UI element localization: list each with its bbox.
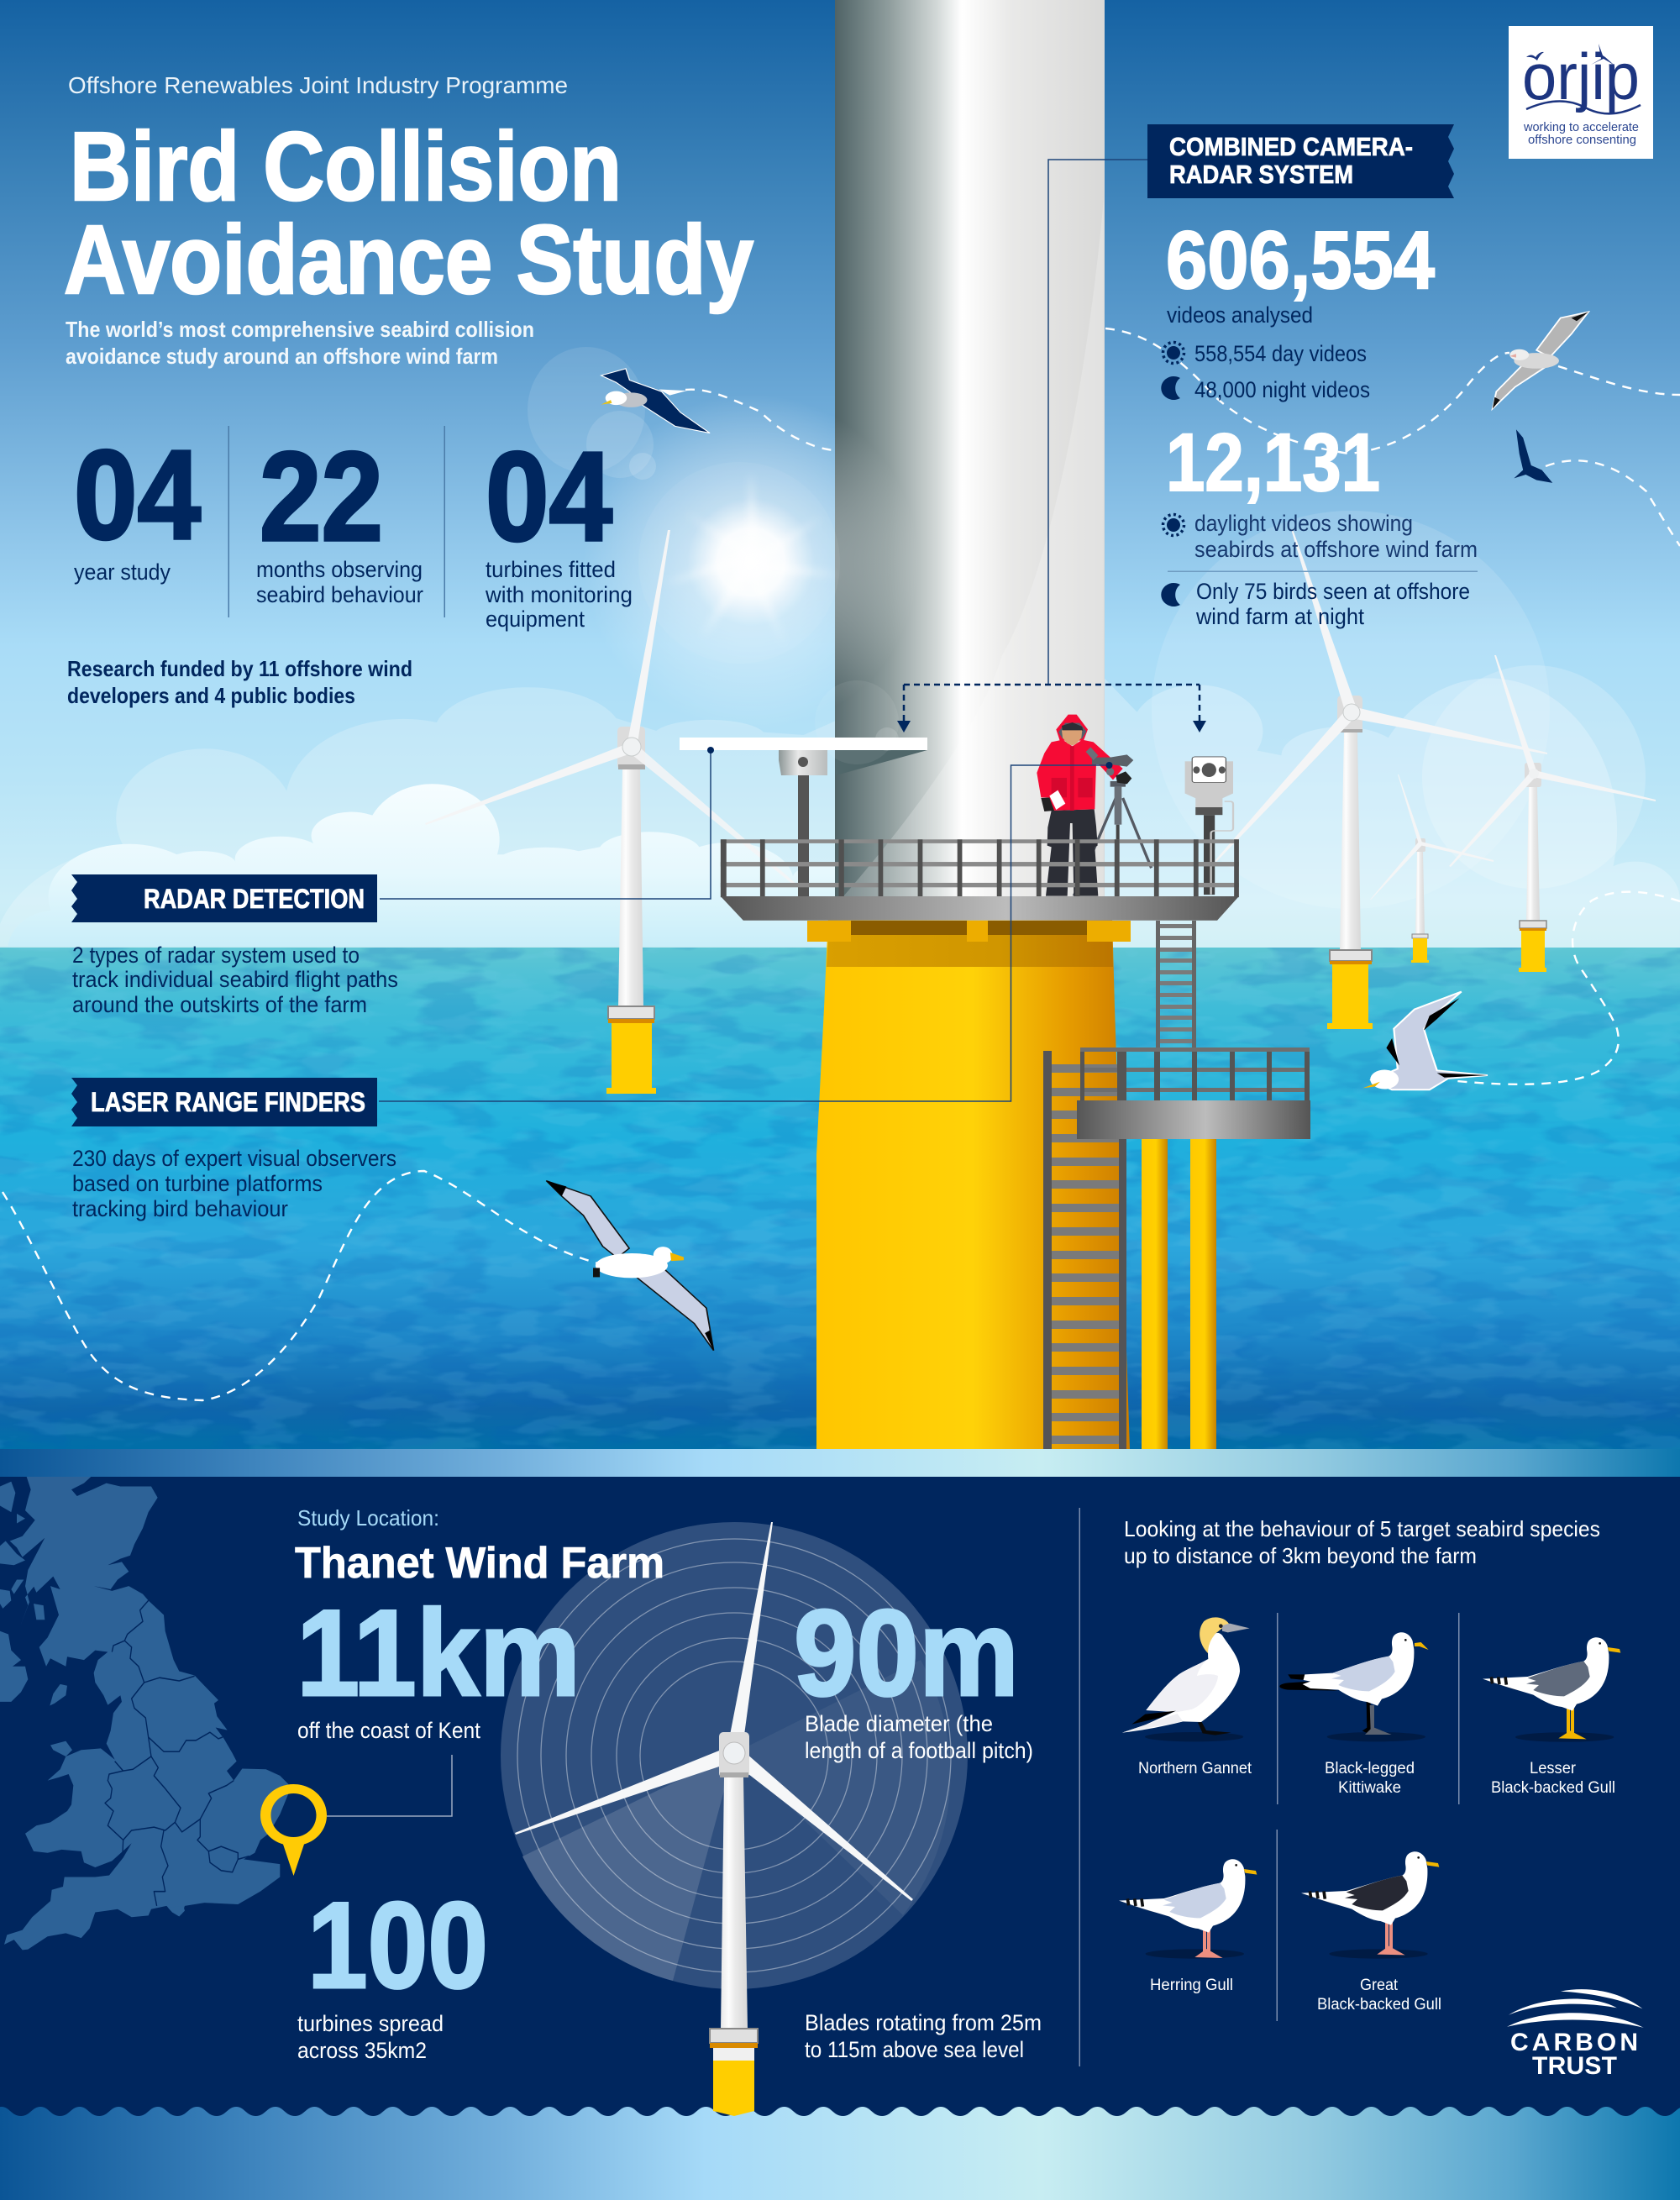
stat: months: 22 [260,425,383,567]
background turbine: left [425,530,798,1094]
bird: black-legged kittiwake: Black-legged [1325,1760,1415,1777]
bird: northern gannet: Northern Gannet [1138,1760,1252,1777]
funding note [67,656,412,708]
radar detection text: around the outskirts of the farm [72,992,367,1017]
bird: navy silhouette [1514,429,1552,483]
laser range finders text [72,1146,396,1221]
subtitle [66,317,534,369]
sea [0,948,1680,1449]
title: Bird Collision [70,112,622,221]
stat: turbines: equipment [486,606,585,632]
yellow foundation [807,916,1131,1449]
bird: albatross over sea [546,1181,714,1351]
icon: location pin [260,1784,327,1876]
bird: great black-backed gull: Black-backed Gull [1317,1996,1441,2014]
title: Avoidance Study [64,205,753,314]
species intro text [1124,1516,1600,1568]
map of Britain [0,1477,291,1950]
yellow support legs [1142,1139,1216,1449]
bird: lesser black-backed gull: Lesser [1530,1760,1577,1777]
banner: laser range finders: LASER RANGE FINDERS [91,1087,365,1117]
radar rotor sweep circle [501,1522,968,1989]
funding note: Research funded by 11 offshore wind [67,656,412,681]
key stats [67,423,633,708]
Carbon Trust logo [1507,1989,1644,2080]
stat: 606,554 videos: videos analysed [1167,302,1313,328]
icon: sun [1163,514,1184,536]
programme name: Offshore Renewables Joint Industry Programme [68,72,568,98]
stat: 90m blade: Blade diameter (the [805,1711,993,1736]
icon: moon [1161,583,1180,606]
day videos text: 558,554 day videos [1194,341,1367,366]
header text [64,72,753,369]
connector: laser range finders [379,762,1112,1101]
bird: herring gull: Herring Gull [1150,1977,1233,1994]
large wind turbine [515,1522,913,2116]
stat: 100 turbines: 100 [307,1877,488,2014]
ORJIP logo [1509,26,1653,159]
stat: 100 turbines [297,1877,488,2063]
camera-radar stats [1161,214,1478,629]
lower ladder [1043,1051,1126,1449]
stat: 90m blade: length of a football pitch) [805,1738,1033,1763]
icon: sun [1163,343,1184,363]
blade height text: Blades rotating from 25m [805,2010,1042,2035]
funding note: developers and 4 public bodies [67,683,355,708]
bird: northern gannet [1122,1617,1252,1777]
lower platform with railing [1077,1047,1310,1139]
bird: navy-winged gull top left [601,369,710,433]
species intro text: up to distance of 3km beyond the farm [1124,1543,1477,1568]
radar detection text [72,942,398,1017]
laser range finders text: tracking bird behaviour [72,1196,288,1221]
stat: 100 turbines: turbines spread [297,2011,444,2036]
ORJIP logo: working to accelerate [1523,120,1639,134]
flight paths [3,328,1680,1400]
banner: radar detection: RADAR DETECTION [144,884,365,914]
night birds text [1195,579,1470,629]
location headings and stats [295,1505,1042,2063]
bird: great black-backed gull: Great [1360,1977,1399,1994]
stat: 12,131: 12,131 [1166,417,1380,508]
species intro text: Looking at the behaviour of 5 target seabird species [1124,1516,1600,1541]
blade height text [805,2010,1042,2062]
Carbon Trust logo: TRUST [1532,2052,1617,2080]
icon: moon [1161,376,1180,400]
bird: lesser black-backed gull [1483,1637,1620,1797]
stat: turbines: with monitoring [485,582,633,607]
connector: dashed branch with arrows [897,685,1206,732]
stat: months: seabird behaviour [256,582,423,607]
bird: herring gull [1119,1859,1257,1994]
daylight videos text: seabirds at offshore wind farm [1194,537,1478,562]
night birds text: Only 75 birds seen at offshore [1196,579,1470,604]
daylight videos text [1194,511,1478,562]
upper ladder [1156,921,1196,1047]
radar detection text: 2 types of radar system used to [72,942,360,968]
stat: months [256,425,423,607]
title [64,112,753,314]
observer with telescope [1037,715,1152,896]
bird: great black-backed gull [1301,1851,1441,2014]
laser range finders text: based on turbine platforms [72,1171,323,1196]
stat: year study: 04 [74,423,201,565]
upper platform railing [721,839,1239,921]
bird: black-legged kittiwake [1279,1632,1429,1797]
stat: year study: year study [74,559,171,585]
banner: laser range finders [71,1078,377,1126]
night birds text: wind farm at night [1195,604,1364,629]
stat: 90m blade: 90m [794,1584,1019,1721]
ORJIP logo: offshore consenting [1528,133,1636,147]
daylight videos text: daylight videos showing [1194,511,1413,536]
background turbine: right distant [1449,655,1656,972]
banner: combined camera-radar system [1147,124,1454,198]
wind farm name: Thanet Wind Farm [295,1539,664,1588]
connector: pin to location text [327,1755,452,1816]
subtitle: The world’s most comprehensive seabird collision [66,317,534,342]
banner: combined camera-radar system: COMBINED CAMERA- [1169,132,1413,161]
stat: 11km: 11km [297,1584,580,1721]
stat: 100 turbines: across 35km2 [297,2038,427,2063]
clouds: right [1105,511,1680,948]
study location label: Study Location: [297,1505,439,1531]
radar antenna [680,738,927,899]
stat: turbines [485,425,633,632]
bird: tern over sea [1362,992,1488,1089]
subtitle: avoidance study around an offshore wind farm [66,344,498,369]
bird: grey gull top right [1493,312,1588,409]
banner: combined camera-radar system: RADAR SYSTEM [1169,160,1353,189]
panel: study location [0,1477,1680,2117]
bird: black-legged kittiwake: Kittiwake [1338,1779,1401,1797]
stat: 606,554 videos: 606,554 [1166,214,1435,306]
gradient band and wave footer [0,1449,1680,2200]
blade height text: to 115m above sea level [805,2037,1024,2062]
banner: radar detection [71,874,377,922]
sun and lens flare [528,347,919,764]
laser range finders text: 230 days of expert visual observers [72,1146,396,1171]
clouds: left [0,687,858,947]
ORJIP logo: orjip [1522,39,1640,113]
stat: turbines: 04 [486,425,612,567]
radar detection text: track individual seabird flight paths [72,967,398,992]
Carbon Trust logo: CARBON [1510,2029,1638,2056]
connector: camera system [1048,160,1147,685]
stat: months: months observing [256,557,423,582]
connector: radar detection [380,747,714,899]
bird: lesser black-backed gull: Black-backed Gull [1491,1779,1615,1797]
background: sky [0,0,1680,949]
distance text: off the coast of Kent [297,1718,480,1743]
wind turbine tower [835,0,1105,899]
camera-radar unit [1185,757,1233,895]
background turbine: right large [1215,529,1547,1029]
stat: turbines: turbines fitted [486,557,616,582]
background turbine: smallest [1370,774,1494,963]
night videos text: 48,000 night videos [1194,377,1370,402]
